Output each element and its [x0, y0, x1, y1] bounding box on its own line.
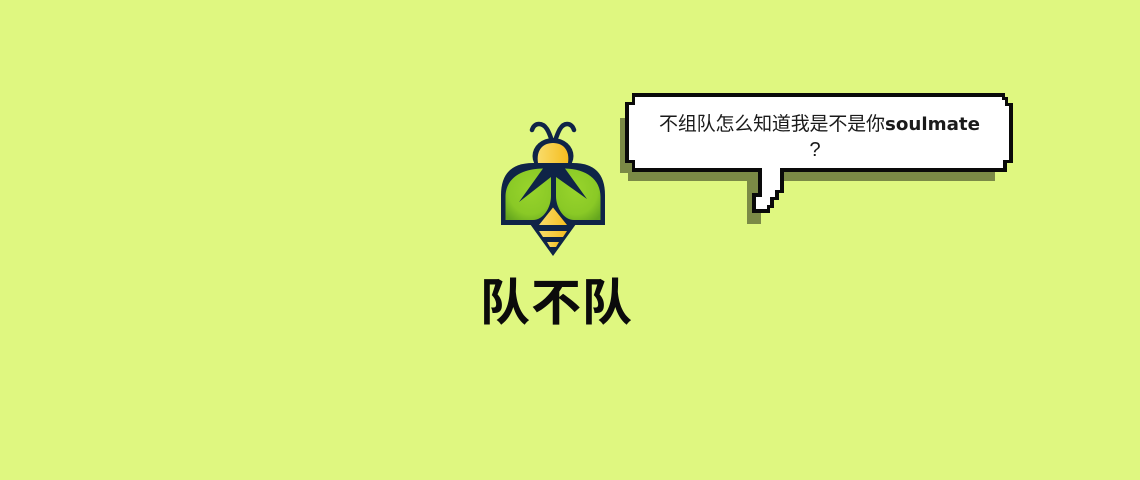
bubble outline — [625, 93, 1013, 213]
icon: left leaf wing — [506, 168, 551, 220]
bubble text — [659, 113, 980, 161]
icon: antennae — [532, 124, 574, 141]
icon: abdomen — [530, 208, 576, 256]
icon: right leaf wing — [556, 168, 600, 220]
bubble shadow — [620, 118, 995, 224]
bubble text: soulmate — [885, 114, 980, 135]
icon: head — [532, 138, 574, 174]
logo: bee with leaf wings — [501, 124, 605, 256]
icon: wings outline — [501, 163, 605, 225]
bubble fill — [629, 97, 1009, 209]
logo wordmark: 队不队 — [480, 263, 632, 335]
speech bubble — [620, 93, 1013, 224]
bubble text: 不组队怎么知道我是不是你 — [659, 113, 885, 135]
bubble text: ? — [809, 139, 821, 161]
